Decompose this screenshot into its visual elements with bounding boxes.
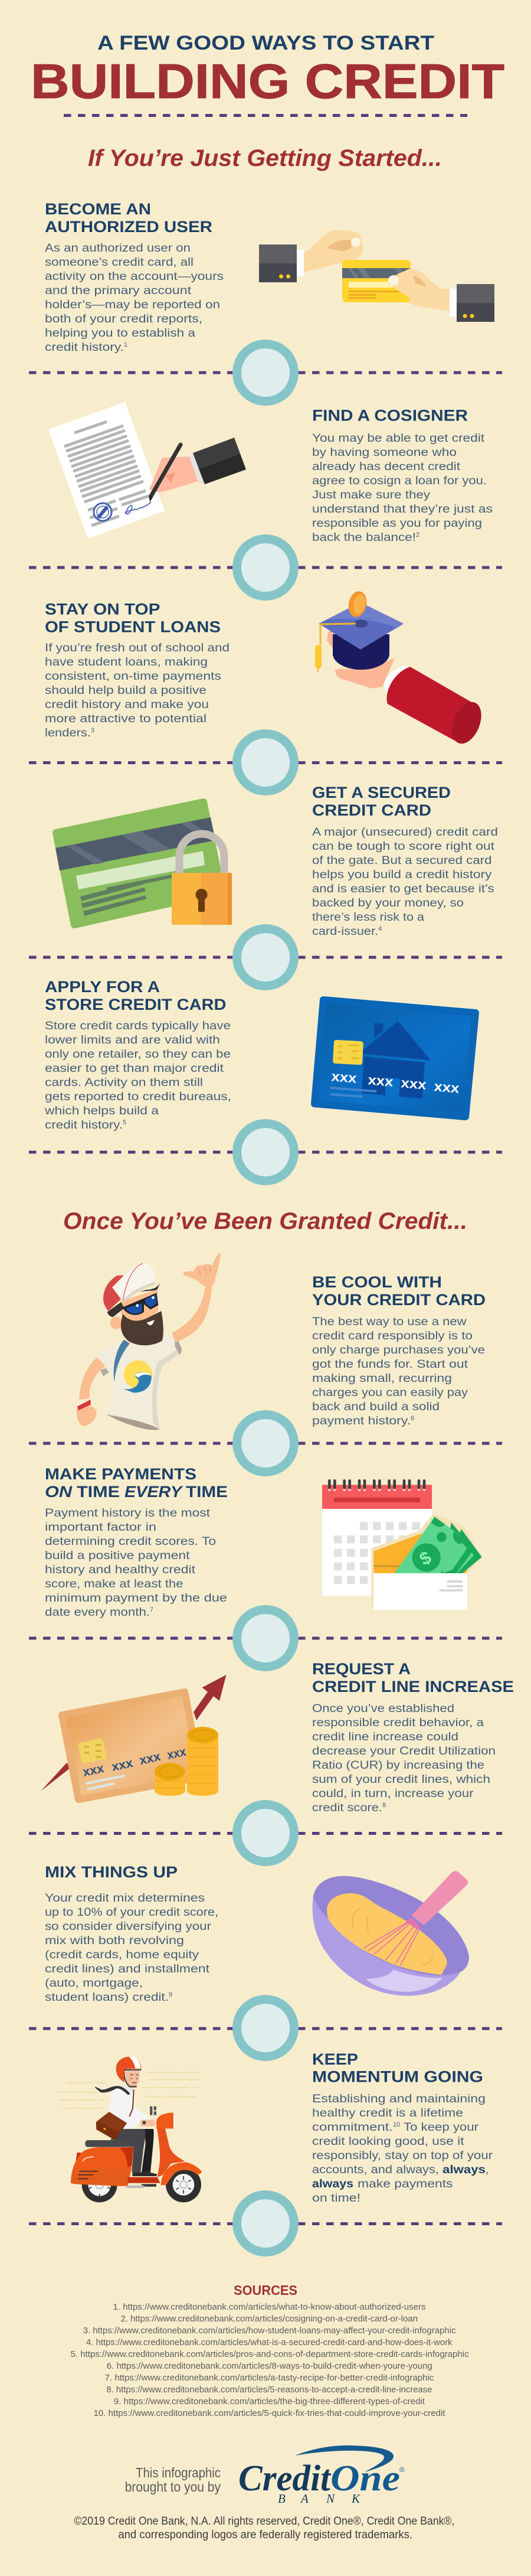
body text: A major (unsecured) credit card — [312, 826, 498, 839]
heading — [312, 784, 451, 819]
body text — [312, 2093, 493, 2205]
body text: healthy credit is a lifetime — [312, 2107, 463, 2120]
panel: apply for a store credit card — [44, 978, 476, 1132]
heading: STORE CREDIT CARD — [45, 996, 227, 1013]
heading — [312, 1273, 486, 1309]
divider with timeline node — [29, 924, 502, 990]
icon: card with rising arrow and coins: xxx — [110, 1756, 135, 1774]
body text: understand that they’re just as — [312, 503, 493, 516]
body text: and the primary account — [45, 285, 192, 297]
logo: Credit One Bank: Credit — [238, 2458, 332, 2499]
body text: already has decent credit — [312, 461, 461, 473]
body text: activity on the account—yours — [45, 270, 224, 283]
sponsor text: This infographic — [136, 2465, 221, 2480]
heading — [45, 200, 212, 236]
divider with timeline node — [29, 1410, 502, 1476]
body text: credit history and make you — [45, 699, 209, 711]
body text: both of your credit reports, — [45, 313, 202, 325]
divider with timeline node — [29, 534, 502, 601]
body text: As an authorized user on — [45, 242, 191, 255]
body text: someone’s credit card, all — [45, 256, 194, 269]
heading — [45, 978, 227, 1013]
body text: credit score. — [312, 1802, 382, 1814]
body text: 4 — [378, 925, 382, 932]
body text: 10 — [393, 2121, 400, 2128]
logo: Credit One Bank: K — [351, 2492, 360, 2506]
body text: on time! — [312, 2192, 360, 2205]
heading: CREDIT LINE INCREASE — [312, 1678, 514, 1695]
icon: green card with padlock — [55, 802, 232, 925]
heading: MIX THINGS UP — [45, 1863, 178, 1881]
divider with timeline node — [29, 340, 502, 406]
body text: back and build a solid — [312, 1401, 440, 1413]
heading: YOUR CREDIT CARD — [312, 1291, 486, 1309]
main title: BUILDING CREDIT — [31, 54, 504, 109]
sources — [71, 2282, 469, 2418]
body text: You may be able to get credit — [312, 432, 485, 445]
body text: date every month. — [45, 1606, 150, 1619]
panel: request a credit line increase — [41, 1660, 514, 1814]
icon: calendar, wallet and cash: $ — [416, 1547, 435, 1570]
heading — [45, 1465, 228, 1501]
divider with timeline node — [29, 2190, 502, 2257]
body text: 8 — [382, 1802, 386, 1809]
panel: keep momentum going — [57, 2050, 493, 2205]
body text: build a positive payment — [45, 1550, 190, 1562]
footer — [74, 2445, 454, 2541]
source list: 4. https://www.creditonebank.com/articles/what-is-a-secured-credit-card-and-how-does-it-work — [86, 2338, 453, 2347]
body text: up to 10% of your credit score, — [45, 1906, 218, 1919]
body text: mix with both revolving — [45, 1935, 184, 1947]
heading: FIND A COSIGNER — [312, 406, 468, 424]
body text — [312, 1316, 485, 1427]
body text: consistent, on-time payments — [45, 670, 221, 683]
heading: BE COOL WITH — [312, 1273, 442, 1291]
source list: 1. https://www.creditonebank.com/articles/what-to-know-about-authorized-users — [113, 2303, 426, 2312]
logo: Credit One Bank: B — [278, 2492, 286, 2506]
icon: blue store card with house: xxx — [331, 1068, 358, 1086]
body text: payment history. — [312, 1415, 411, 1427]
body text: credit history. — [45, 341, 124, 354]
divider with timeline node — [29, 1605, 502, 1671]
heading — [312, 1660, 514, 1695]
divider with timeline node — [29, 1995, 502, 2061]
panel: stay on top of student loans — [45, 589, 487, 748]
icon: card with rising arrow and coins — [41, 1675, 227, 1799]
body text: can be tough to score right out — [312, 840, 495, 853]
body text: Your credit mix determines — [45, 1892, 205, 1905]
body text — [45, 642, 230, 739]
source list: 7. https://www.creditonebank.com/articles/a-tasty-recipe-for-better-credit-infographic — [105, 2373, 434, 2383]
logo: Credit One Bank: A — [300, 2492, 309, 2506]
body text: could, in turn, increase your — [312, 1788, 474, 1800]
body text: score, make at least the — [45, 1578, 183, 1590]
body text: helping you to establish a — [45, 327, 196, 340]
body text: backed by your money, so — [312, 897, 464, 909]
icon: card with rising arrow and coins: xxx — [138, 1750, 162, 1768]
body text: Once you’ve established — [312, 1703, 454, 1715]
source list: 10. https://www.creditonebank.com/articles/5-quick-fix-tries-that-could-improve-your-credit — [93, 2409, 445, 2418]
body text: easier to get than major credit — [45, 1062, 224, 1075]
source list — [71, 2303, 469, 2418]
body text — [312, 1703, 496, 1814]
source list: 5. https://www.creditonebank.com/articles/pros-and-cons-of-department-store-credit-cards-infographic — [71, 2350, 469, 2359]
heading: TIME — [186, 1483, 228, 1501]
body text: sum of your credit lines, which — [312, 1773, 490, 1786]
icon: bearded man with cap pointing up — [77, 1253, 221, 1430]
icon: mixing bowl and whisk — [313, 1871, 469, 1995]
body text — [45, 1507, 227, 1619]
body text — [44, 1020, 231, 1132]
body text: The best way to use a new — [312, 1316, 467, 1328]
section heading: granted credit: Once You’ve Been Granted Credit... — [63, 1208, 467, 1234]
body text: history and healthy credit — [45, 1564, 196, 1576]
icon: card with rising arrow and coins: xxx — [166, 1745, 188, 1762]
body text: have student loans, making — [45, 656, 208, 669]
body text: make payments — [358, 2178, 453, 2190]
heading: TIME — [77, 1483, 120, 1501]
body text: 6 — [411, 1415, 414, 1422]
body text: responsible as you for paying — [312, 517, 482, 530]
body text: gets reported to credit bureaus, — [45, 1091, 231, 1103]
body text: got the funds for. Start out — [312, 1358, 468, 1371]
body text: lenders. — [45, 727, 91, 739]
panel: become an authorized user — [45, 200, 494, 354]
body text: Ratio (CUR) by increasing the — [312, 1759, 484, 1772]
body text: agree to cosign a loan for you. — [312, 475, 487, 487]
heading — [45, 600, 221, 635]
body text: decrease your Credit Utilization — [312, 1745, 496, 1757]
body text: charges you can easily pay — [312, 1387, 468, 1399]
body text: commitment. — [312, 2121, 393, 2134]
icon: blue store card with house: xxx — [368, 1072, 394, 1090]
body text — [45, 242, 224, 354]
panel: mix things up — [45, 1863, 469, 2004]
body text: Establishing and maintaining — [312, 2093, 486, 2105]
divider with timeline node — [29, 729, 502, 795]
heading: OF STUDENT LOANS — [45, 618, 221, 635]
sponsor text: brought to you by — [125, 2479, 221, 2495]
body text: credit card responsibly is to — [312, 1330, 473, 1342]
body text: 9 — [169, 1991, 172, 1998]
body text: Payment history is the most — [45, 1507, 211, 1519]
body text: If you’re fresh out of school and — [45, 642, 230, 654]
body text: of the gate. But a secured card — [312, 855, 492, 867]
heading: MAKE PAYMENTS — [45, 1465, 196, 1483]
body text: lower limits and are valid with — [45, 1034, 220, 1046]
header — [31, 32, 504, 116]
body text: which helps build a — [44, 1105, 159, 1117]
body text: (credit cards, home equity — [45, 1949, 199, 1961]
source list: 9. https://www.creditonebank.com/articles/the-big-three-different-types-of-credit — [114, 2397, 425, 2407]
panel: be cool with your credit card — [77, 1253, 486, 1430]
sources heading: SOURCES — [234, 2282, 297, 2298]
heading: BECOME AN — [45, 200, 151, 218]
logo: Credit One Bank: One — [330, 2458, 400, 2499]
heading: APPLY FOR A — [45, 978, 160, 996]
sponsor text — [125, 2465, 221, 2495]
body text: determining credit scores. To — [45, 1535, 216, 1548]
body text: back the balance! — [312, 531, 416, 544]
divider with timeline node — [29, 1119, 502, 1185]
body text: credit looking good, use it — [312, 2135, 464, 2148]
logo: Credit One Bank — [238, 2445, 405, 2506]
body text: more attractive to potential — [45, 713, 206, 725]
body text — [312, 826, 498, 938]
body text: should help build a positive — [45, 684, 206, 697]
body text: always — [442, 2164, 486, 2176]
heading: ON — [45, 1483, 73, 1501]
body text: helps you build a credit history — [312, 869, 492, 881]
icon: blue store card with house — [314, 1000, 476, 1117]
copyright: ©2019 Credit One Bank, N.A. All rights reserved, Credit One®, Credit One Bank®, — [74, 2515, 454, 2528]
logo: Credit One Bank: ® — [399, 2466, 405, 2474]
body text: Store credit cards typically have — [45, 1020, 231, 1032]
divider with timeline node — [29, 1800, 502, 1866]
body text: responsible credit behavior, a — [312, 1717, 484, 1729]
body text: only one retailer, so they can be — [45, 1048, 231, 1061]
body text: 7 — [150, 1606, 153, 1613]
copyright: and corresponding logos are federally registered trademarks. — [118, 2528, 412, 2541]
heading: MOMENTUM GOING — [312, 2068, 483, 2086]
body text: always — [312, 2178, 353, 2190]
heading: CREDIT CARD — [312, 801, 431, 819]
icon: blue store card with house: xxx — [434, 1078, 460, 1096]
source list: 6. https://www.creditonebank.com/articles/8-ways-to-build-credit-when-youre-young — [107, 2362, 432, 2371]
body text: credit lines) and installment — [45, 1963, 210, 1975]
icon: hands passing a credit card — [259, 230, 494, 322]
body text: responsibly, stay on top of your — [312, 2150, 493, 2162]
section heading: getting started: If You’re Just Getting Started... — [88, 145, 442, 171]
source list: 8. https://www.creditonebank.com/articles/5-reasons-to-accept-a-credit-line-increase — [106, 2385, 432, 2395]
icon: blue store card with house: xxx — [401, 1075, 427, 1093]
body text: card-issuer. — [312, 925, 378, 938]
body text — [45, 1892, 218, 2004]
body text: by having someone who — [312, 446, 457, 459]
body text: so consider diversifying your — [45, 1920, 212, 1933]
body text: Just make sure they — [312, 489, 431, 501]
body text: 5 — [123, 1119, 126, 1126]
body text: important factor in — [45, 1521, 156, 1534]
body text: minimum payment by the due — [45, 1592, 227, 1605]
icon: calendar, wallet and cash — [322, 1479, 482, 1610]
body text: making small, recurring — [312, 1372, 452, 1385]
panel: make payments on time every time — [45, 1465, 482, 1619]
copyright — [74, 2515, 454, 2541]
panel: get a secured credit card — [55, 784, 498, 938]
icon: signing a document — [48, 402, 246, 539]
heading: STAY ON TOP — [45, 600, 160, 618]
body text: (auto, mortgage, — [45, 1977, 143, 1990]
body text: holder’s—may be reported on — [45, 299, 220, 311]
kicker heading: A FEW GOOD WAYS TO START — [97, 32, 434, 54]
source list: 2. https://www.creditonebank.com/articles/cosigning-on-a-credit-card-or-loan — [120, 2314, 418, 2324]
panel: find a cosigner — [48, 402, 493, 544]
heading: REQUEST A — [312, 1660, 411, 1678]
heading: EVERY — [124, 1483, 183, 1501]
body text: there’s less risk to a — [312, 911, 424, 924]
body text: accounts, and always, — [312, 2164, 439, 2176]
body text: 1 — [124, 341, 127, 348]
icon: hand holding graduation cap and coin — [315, 589, 487, 748]
source list: 3. https://www.creditonebank.com/articles/how-student-loans-may-affect-your-credit-infographic — [83, 2326, 456, 2336]
heading: GET A SECURED — [312, 784, 451, 801]
body text: , — [486, 2164, 489, 2176]
body text: credit history. — [45, 1119, 123, 1132]
body text: credit line increase could — [312, 1731, 458, 1743]
heading: AUTHORIZED USER — [45, 218, 212, 236]
body text: only charge purchases you’ve — [312, 1344, 485, 1357]
body text: To keep your — [404, 2121, 479, 2134]
heading — [312, 2050, 483, 2086]
body text — [312, 432, 493, 544]
body text: 2 — [416, 531, 419, 539]
body text: student loans) credit. — [45, 1991, 169, 2004]
icon: man riding orange scooter — [57, 2057, 202, 2202]
body text: 3 — [91, 727, 94, 734]
logo: Credit One Bank: N — [326, 2492, 335, 2506]
body text: cards. Activity on them still — [45, 1077, 203, 1089]
body text: and is easier to get because it’s — [312, 883, 494, 895]
heading: KEEP — [312, 2050, 358, 2068]
icon: card with rising arrow and coins: xxx — [81, 1762, 106, 1779]
